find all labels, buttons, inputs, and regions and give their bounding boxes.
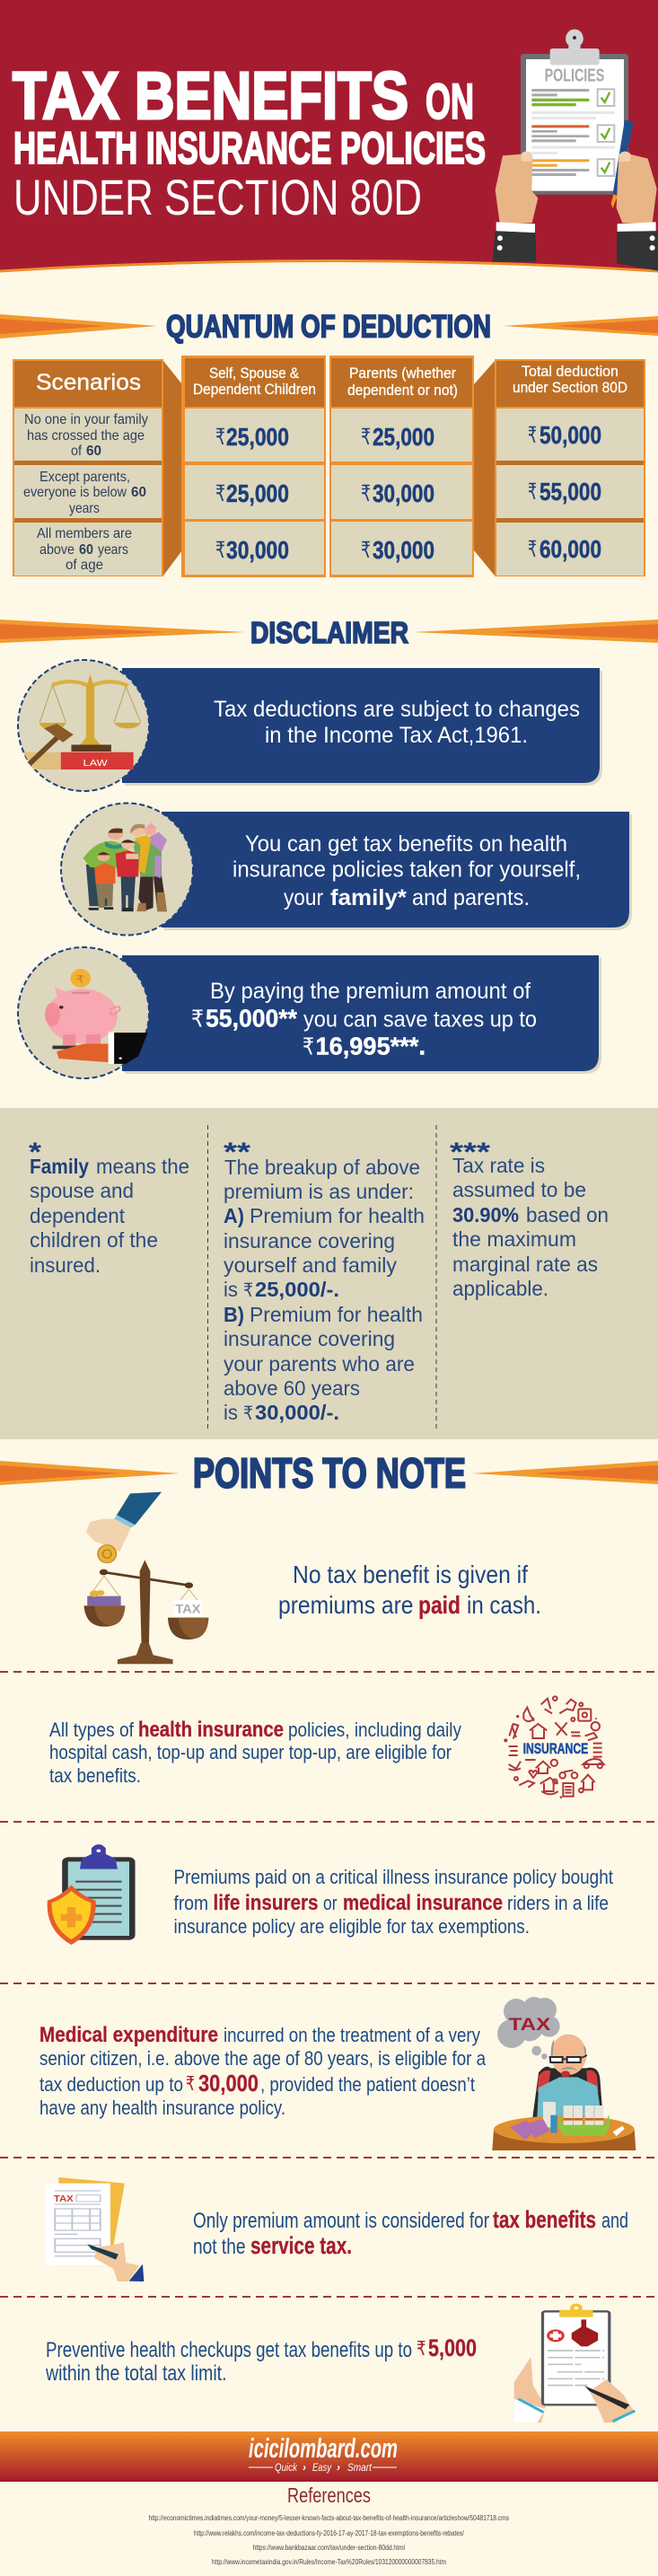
column: total deduction: 60,000	[540, 535, 601, 563]
footnote: premium breakup: 30,000/-.	[255, 1401, 339, 1424]
footnote: tax rate: the maximum	[452, 1227, 576, 1251]
point: preventive checkups: Preventive health checkups get tax benefits up to	[46, 2338, 412, 2362]
footnote: premium breakup: premium is as under:	[224, 1180, 414, 1203]
panel: premium savings: 55,000**	[206, 1004, 297, 1033]
column: self, spouse and dependent children	[181, 356, 326, 577]
icon: law scales, gavel and book: LAW	[83, 758, 108, 769]
column: scenarios: 60	[79, 542, 93, 558]
footnote: premium breakup: B)	[224, 1303, 244, 1326]
title	[13, 58, 486, 225]
deduction table	[13, 356, 645, 577]
panel: premium savings: ₹	[303, 1033, 314, 1059]
column: scenarios: of age	[66, 558, 103, 573]
point: medical expenditure: , provided the patient doesn’t	[260, 2073, 475, 2096]
section heading: disclaimer: DISCLAIMER	[250, 616, 408, 649]
icon: medical report clipboard with hands	[514, 2304, 635, 2422]
point: critical illness	[48, 1844, 613, 1945]
point: service tax: and	[601, 2209, 628, 2233]
point: all health insurance types: health insurance	[138, 1718, 284, 1742]
column: scenarios: everyone is below	[23, 485, 127, 500]
footnote: premium breakup: 25,000/-.	[255, 1278, 339, 1301]
footer band: ›	[337, 2461, 340, 2474]
panel: premium savings	[18, 947, 601, 1078]
column: parents: ₹	[361, 425, 371, 450]
column: scenarios: 60	[131, 485, 146, 500]
point: service tax: tax benefits	[493, 2206, 596, 2233]
icon: piggy bank and coin	[18, 947, 149, 1078]
column: scenarios: years	[69, 501, 100, 516]
footnote: premium breakup: Premium for health	[250, 1303, 423, 1326]
column: self, spouse and dependent children: ₹	[215, 425, 225, 450]
point: service tax: Only premium amount is considered for	[193, 2209, 489, 2233]
footnote: family: children of the	[30, 1228, 158, 1252]
point: preventive checkups: within the total tax limit.	[45, 2361, 226, 2386]
point: critical illness: medical insurance	[343, 1891, 503, 1915]
panel: premium savings: you can save taxes up to	[303, 1007, 537, 1033]
column: parents: 25,000	[373, 423, 434, 451]
icon: hand dropping coin on tax scale	[84, 1492, 208, 1664]
point: cash premiums	[84, 1492, 541, 1664]
footnote: family: means the	[96, 1155, 189, 1178]
icon: family group	[61, 803, 193, 936]
column: total deduction: 55,000	[540, 478, 601, 506]
footnote: family: insured.	[30, 1253, 101, 1277]
column: scenarios: Except parents,	[39, 470, 130, 485]
section heading: quantum of deduction: QUANTUM OF DEDUCTION	[166, 309, 491, 345]
header banner	[0, 0, 658, 271]
section heading: disclaimer	[0, 616, 658, 649]
column: scenarios: of	[71, 444, 82, 459]
point: medical expenditure: incurred on the treatment of a very	[224, 2024, 480, 2046]
point: cash premiums: No tax benefit is given if	[293, 1561, 528, 1588]
column: self, spouse and dependent children: ₹	[215, 538, 225, 563]
panel: footnotes	[0, 1108, 658, 1439]
section heading: quantum of deduction	[0, 309, 658, 345]
section heading: points to note: POINTS TO NOTE	[193, 1449, 466, 1496]
column: parents: Parents (whether	[349, 365, 456, 382]
references: https://www.bankbazaar.com/tax/under-section-80dd.html	[253, 2544, 405, 2552]
icon: tax form with hand and pen	[45, 2177, 144, 2281]
panel: tax benefits for family: insurance policies taken for yourself,	[232, 857, 581, 882]
column: total deduction: under Section 80D	[513, 379, 627, 396]
references	[149, 2484, 509, 2566]
column: self, spouse and dependent children: Dependent Children	[193, 381, 316, 398]
references: http://www.incometaxindia.gov.in/Rules/Income-Tax%20Rules/103120000000007835.htm	[212, 2558, 446, 2566]
footer band: Quick	[275, 2461, 298, 2474]
panel: tax deductions subject to change: in the Income Tax Act,1961.	[265, 723, 528, 748]
panel: premium savings: By paying the premium amount of	[210, 979, 531, 1004]
footer band: ›	[303, 2461, 306, 2474]
footer band: Easy	[312, 2461, 332, 2474]
footnote: family	[29, 1138, 189, 1277]
references: http://www.relakhs.com/income-tax-deductions-fy-2016-17-ay-2017-18-tax-exemptions-benefits-rebates/	[194, 2529, 465, 2537]
footnote: tax rate: applicable.	[452, 1277, 548, 1300]
footnote: premium breakup: is	[224, 1401, 238, 1424]
point: all health insurance types: All types of	[49, 1719, 135, 1741]
column: scenarios: years	[98, 542, 128, 558]
point: medical expenditure: ₹	[186, 2072, 195, 2095]
references: http://economictimes.indiatimes.com/your-money/5-lesser-known-facts-about-tax-benefits-of-health-insurance/articleshow/50481718.cms	[149, 2514, 509, 2522]
footnote: tax rate: Tax rate is	[452, 1154, 545, 1177]
point: all health insurance types: tax benefits.	[49, 1764, 141, 1787]
point: critical illness: riders in a life	[507, 1892, 609, 1914]
title: UNDER SECTION 80D	[13, 169, 422, 225]
table connectors	[163, 361, 495, 576]
point: medical expenditure: 30,000	[198, 2070, 259, 2097]
icon: policies clipboard held by hands	[493, 30, 658, 271]
icon: clipboard with shield	[48, 1844, 136, 1945]
point: cash premiums: paid	[418, 1591, 461, 1619]
footnote: tax rate: based on	[526, 1203, 609, 1226]
column: total deduction: ₹	[528, 479, 537, 505]
panel: premium savings: 16,995***.	[316, 1033, 426, 1059]
column: parents: ₹	[361, 538, 371, 563]
panel: tax benefits for family	[61, 803, 632, 936]
point: medical expenditure: senior citizen, i.e. above the age of 80 years, is eligible for a	[39, 2047, 487, 2070]
footnote: premium breakup: The breakup of above	[224, 1156, 420, 1179]
footnote: family: spouse and	[30, 1179, 134, 1202]
icon: policies clipboard held by hands: POLICIES	[545, 66, 604, 86]
footnote: premium breakup: Premium for health	[250, 1204, 425, 1227]
point: cash premiums: in cash.	[467, 1591, 541, 1619]
title: ON	[426, 73, 474, 129]
point: medical expenditure: Medical expenditure	[39, 2023, 218, 2047]
point: critical illness: life insurers	[214, 1891, 318, 1915]
point: medical expenditure: have any health insurance policy.	[39, 2097, 285, 2119]
footnote: premium breakup: **	[224, 1138, 250, 1167]
icon: senior citizen with medicines thinking of tax: TAX	[509, 2016, 550, 2035]
point: preventive checkups	[45, 2304, 635, 2422]
point: medical expenditure: tax deduction up to	[39, 2073, 183, 2096]
footnote: tax rate: assumed to be	[452, 1178, 586, 1201]
point: critical illness: or	[323, 1892, 338, 1914]
panel: tax benefits for family: You can get tax benefits on health	[245, 831, 567, 857]
references: References	[287, 2484, 371, 2507]
column: total deduction: Total deduction	[522, 363, 619, 380]
column: self, spouse and dependent children: 25,000	[226, 423, 289, 451]
footer band	[0, 2431, 658, 2482]
icon: tax form with hand and pen: TAX	[54, 2194, 74, 2203]
point: service tax: not the	[193, 2235, 246, 2259]
column: total deduction	[495, 359, 645, 576]
column: scenarios: has crossed the age	[27, 428, 145, 444]
footnote: premium breakup: insurance covering	[224, 1327, 395, 1350]
footnote: premium breakup: your parents who are	[224, 1352, 415, 1376]
footnote: premium breakup: yourself and family	[224, 1253, 397, 1277]
icon: insurance word circle	[504, 1696, 604, 1798]
footnote: family: dependent	[30, 1204, 125, 1227]
column: parents: dependent or not)	[347, 382, 458, 399]
panel: premium savings: ₹	[191, 1006, 204, 1033]
point: critical illness: from	[174, 1892, 208, 1914]
icon: insurance word circle: INSURANCE	[523, 1740, 588, 1757]
title: TAX BENEFITS	[13, 58, 408, 133]
footnote: family: *	[29, 1138, 41, 1167]
column: self, spouse and dependent children: 25,000	[226, 479, 289, 507]
icon: piggy bank and coin: ₹	[75, 972, 84, 985]
column: scenarios: All members are	[37, 526, 132, 541]
column: self, spouse and dependent children: Self, Spouse &	[209, 365, 300, 382]
footnote: premium breakup: A)	[224, 1204, 244, 1227]
column: total deduction: ₹	[528, 423, 537, 448]
point: medical expenditure	[39, 1997, 636, 2150]
column: self, spouse and dependent children: 30,000	[226, 536, 289, 564]
footnote: tax rate: 30.90%	[452, 1203, 519, 1226]
icon: senior citizen with medicines thinking of tax	[492, 1997, 636, 2150]
panel: tax deductions subject to change: Tax deductions are subject to changes	[214, 697, 580, 722]
footnote: family: Family	[30, 1155, 89, 1178]
point: preventive checkups: 5,000	[428, 2334, 477, 2361]
footnote: premium breakup: ₹	[243, 1403, 253, 1424]
column: scenarios: above	[39, 542, 75, 558]
point: all health insurance types: policies, including daily	[288, 1719, 461, 1741]
footer band: Smart	[347, 2461, 373, 2474]
point: preventive checkups: ₹	[417, 2337, 426, 2360]
footnote: tax rate: ***	[450, 1138, 490, 1167]
point: service tax: service tax.	[250, 2232, 352, 2259]
panel: tax benefits for family: your	[284, 885, 323, 910]
panel: tax benefits for family: family*	[330, 885, 407, 910]
column: scenarios: Scenarios	[36, 370, 141, 395]
column: total deduction: ₹	[528, 537, 537, 562]
column: parents: 30,000	[373, 479, 434, 507]
panel: tax benefits for family: and parents.	[412, 885, 530, 910]
footnote: premium breakup	[224, 1138, 425, 1424]
point: all health insurance types	[49, 1696, 604, 1798]
section heading: points to note	[0, 1449, 658, 1496]
column: total deduction: 50,000	[540, 421, 601, 449]
footnote: premium breakup: ₹	[243, 1280, 253, 1301]
footnote: premium breakup: insurance covering	[224, 1229, 395, 1253]
icon: law scales, gavel and book	[18, 660, 149, 791]
footnote: tax rate: marginal rate as	[452, 1253, 598, 1276]
column: scenarios: No one in your family	[24, 412, 148, 427]
panel: tax deductions subject to change	[18, 660, 602, 791]
point: cash premiums: premiums are	[278, 1591, 413, 1619]
icon: hand dropping coin on tax scale: TAX	[175, 1602, 201, 1616]
footer band: icicilombard.com	[249, 2432, 398, 2464]
column: self, spouse and dependent children: ₹	[215, 481, 225, 506]
footnote: tax rate	[450, 1138, 609, 1300]
point: service tax	[45, 2177, 628, 2281]
column: parents	[329, 356, 474, 577]
column: parents: 30,000	[373, 536, 434, 564]
point: all health insurance types: hospital cash, top-up and super top-up, are eligible for	[49, 1741, 452, 1763]
column: scenarios: 60	[86, 444, 101, 459]
footnote: premium breakup: above 60 years	[224, 1376, 360, 1400]
column: parents: ₹	[361, 481, 371, 506]
column: scenarios	[13, 359, 163, 576]
point: critical illness: insurance policy are eligible for tax exemptions.	[174, 1915, 530, 1938]
footnote: premium breakup: is	[224, 1278, 238, 1301]
